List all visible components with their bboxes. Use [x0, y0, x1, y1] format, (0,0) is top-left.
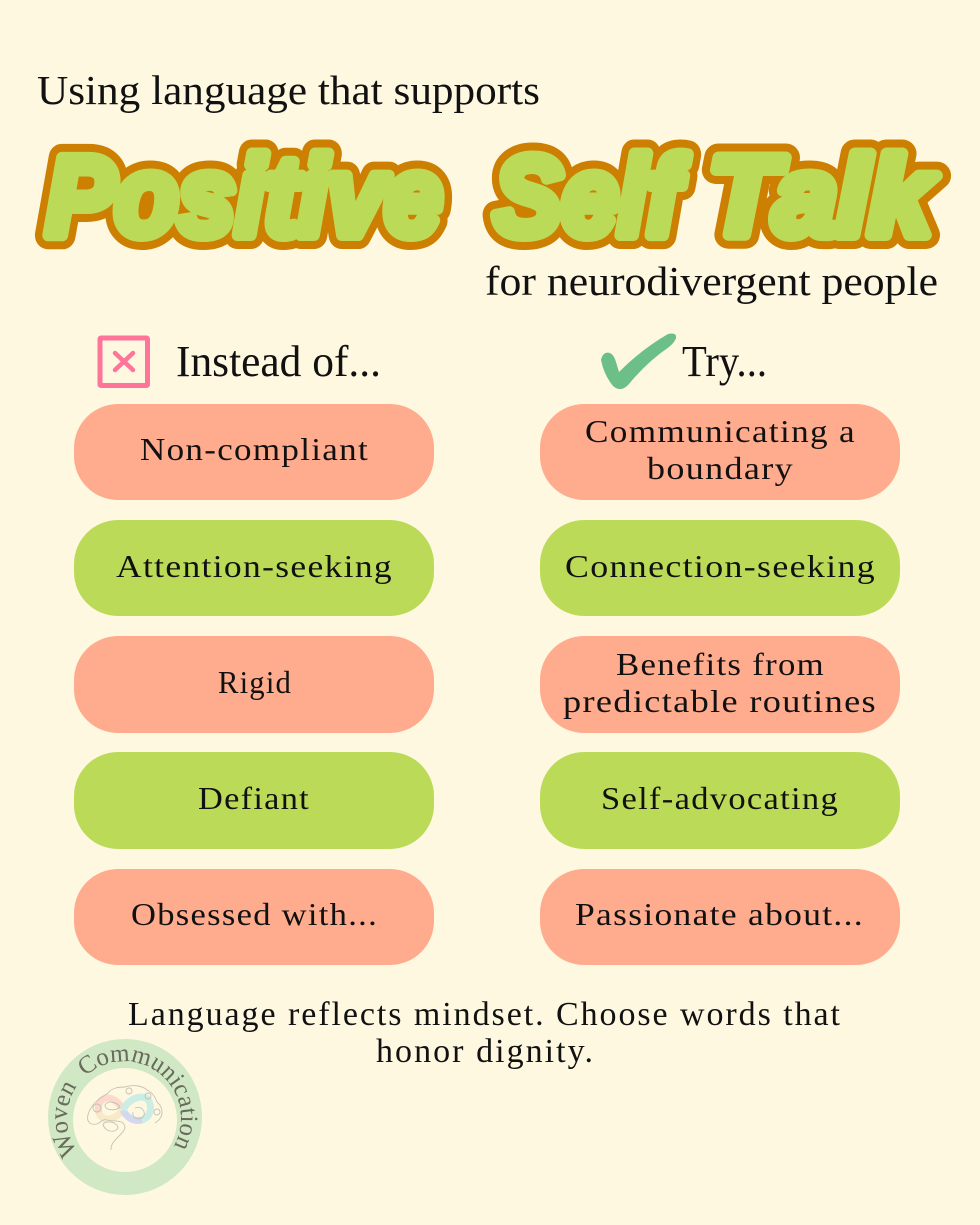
closing statement — [128, 996, 841, 1070]
title: Positive Self Talk: Self — [494, 134, 689, 259]
logo: brain outline — [88, 1086, 162, 1150]
pill: Passionate about — [540, 869, 900, 965]
logo: brain nodes — [93, 1088, 160, 1115]
pill: Communicating a boundary: Communicating a — [585, 413, 856, 449]
pill: Passionate about: Passionate about... — [575, 896, 864, 932]
title: Positive Self Talk: Talk — [708, 134, 937, 259]
subheading: audience: for neurodivergent people — [485, 258, 938, 304]
pill: Self-advocating: Self-advocating — [601, 780, 839, 816]
column heading: Instead of: Instead of... — [176, 337, 381, 386]
pill: Obsessed with: Obsessed with... — [131, 896, 378, 932]
pill: Rigid: Rigid — [218, 664, 292, 700]
pill: Rigid — [74, 636, 434, 733]
pill: Non-compliant: Non-compliant — [140, 431, 369, 467]
logo: Woven Communication — [48, 1039, 202, 1195]
closing statement: honor dignity. — [376, 1033, 593, 1070]
logo lettering: Woven Communication — [52, 1049, 198, 1160]
pill: Defiant — [74, 752, 434, 849]
panel: instead of list — [74, 404, 434, 965]
pill: Benefits from predictable routines: predictable routines — [563, 683, 877, 719]
icon: cross box — [100, 338, 148, 386]
heading: intro line: Using language that supports — [37, 67, 540, 113]
title: Positive Self Talk: Talk — [708, 134, 937, 259]
pill: Non-compliant — [74, 404, 434, 500]
column heading: Try: Try... — [682, 337, 767, 386]
pill: Attention-seeking — [74, 520, 434, 616]
pill: Connection-seeking — [540, 520, 900, 616]
pill: Attention-seeking: Attention-seeking — [116, 548, 393, 584]
title: Positive Self Talk: Positive — [46, 134, 442, 259]
logo: infinity loop — [98, 1097, 151, 1121]
title: Positive Self Talk: Positive — [46, 134, 442, 259]
closing statement: Language reflects mindset. Choose words that — [128, 996, 841, 1033]
pill: Communicating a boundary: boundary — [647, 450, 794, 486]
title: Positive Self Talk — [46, 134, 937, 259]
pill: Obsessed with — [74, 869, 434, 965]
pill: Communicating a boundary — [540, 404, 900, 500]
pill: Connection-seeking: Connection-seeking — [565, 548, 876, 584]
panel: try list — [540, 404, 900, 965]
icon: green check mark — [601, 334, 676, 389]
pill: Self-advocating — [540, 752, 900, 849]
pill: Benefits from predictable routines — [540, 636, 900, 733]
logo ring — [48, 1039, 202, 1195]
pill: Benefits from predictable routines: Benefits from — [616, 646, 825, 682]
pill: Defiant: Defiant — [198, 780, 310, 816]
title: Positive Self Talk: Self — [494, 134, 689, 259]
